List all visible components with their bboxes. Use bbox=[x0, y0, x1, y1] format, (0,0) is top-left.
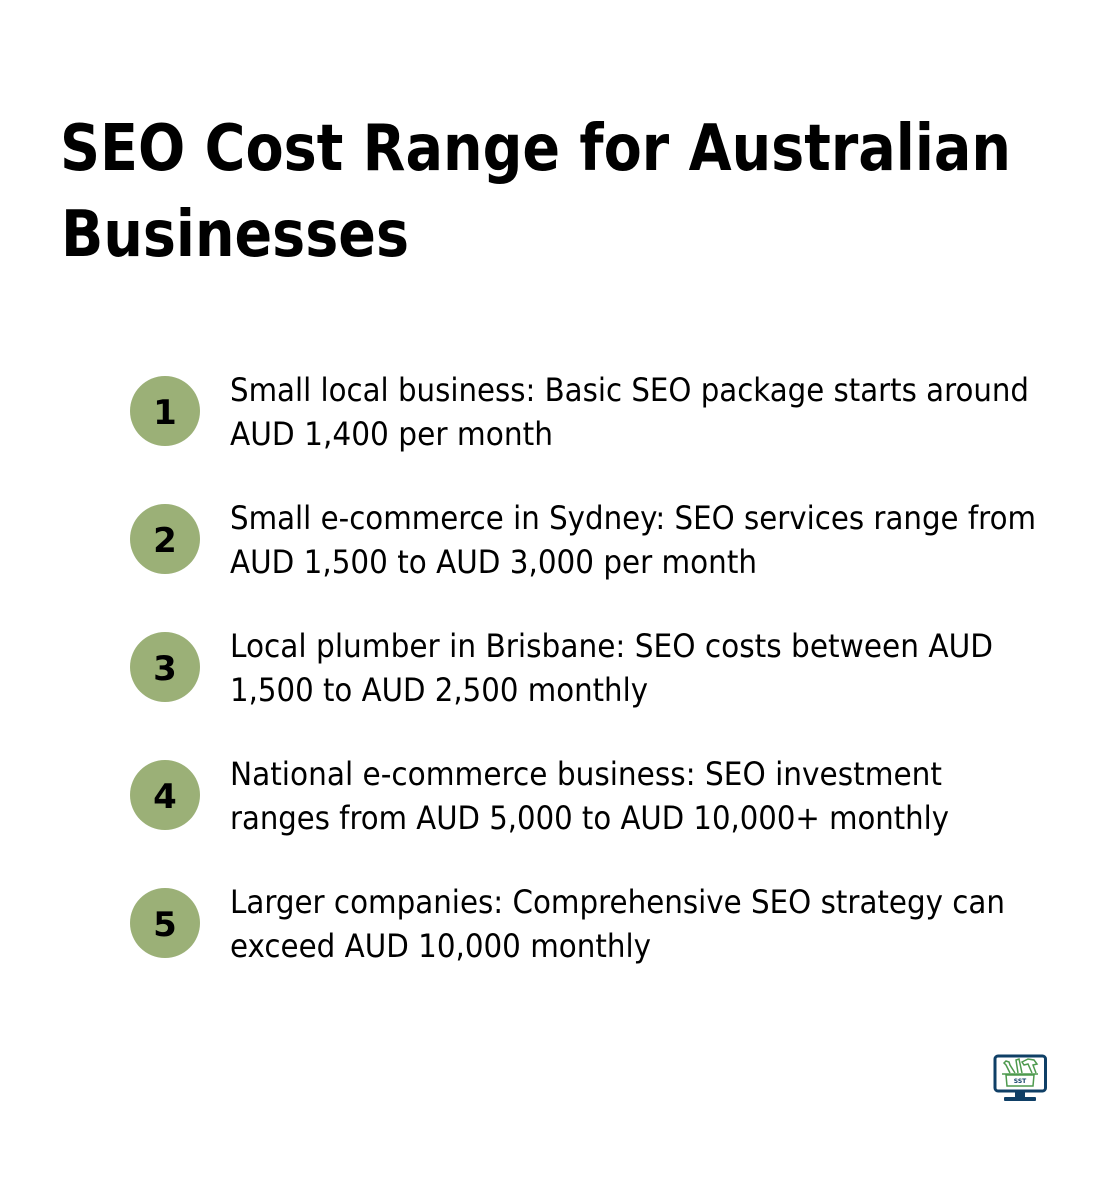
title: Businesses bbox=[61, 198, 409, 272]
text 2 bbox=[230, 499, 1036, 581]
icon: computer monitor with toolbox logo: SST bbox=[1014, 1078, 1027, 1085]
badge 1: 1 bbox=[153, 393, 177, 433]
title bbox=[60, 112, 1011, 272]
badge 5 bbox=[130, 888, 200, 958]
text 5: Larger companies: Comprehensive SEO strategy can bbox=[230, 883, 1005, 921]
item 1 bbox=[130, 371, 1029, 453]
text 4: National e-commerce business: SEO investment bbox=[230, 755, 942, 793]
badge 3: 3 bbox=[153, 649, 177, 689]
text 3: Local plumber in Brisbane: SEO costs between AUD bbox=[230, 627, 993, 665]
text 5 bbox=[230, 883, 1005, 965]
text 3 bbox=[230, 627, 993, 709]
item 5 bbox=[130, 883, 1005, 965]
text 3: 1,500 to AUD 2,500 monthly bbox=[230, 671, 648, 709]
item 2 bbox=[130, 499, 1036, 581]
text 5: exceed AUD 10,000 monthly bbox=[230, 927, 651, 965]
icon: computer monitor with toolbox logo bbox=[995, 1056, 1046, 1101]
text 1: Small local business: Basic SEO package starts around bbox=[230, 371, 1029, 409]
text 1: AUD 1,400 per month bbox=[230, 415, 553, 453]
list of SEO cost ranges bbox=[130, 371, 1036, 965]
badge 5: 5 bbox=[153, 905, 177, 945]
badge 4: 4 bbox=[153, 777, 177, 817]
text 4 bbox=[230, 755, 949, 837]
text 4: ranges from AUD 5,000 to AUD 10,000+ monthly bbox=[230, 799, 949, 837]
badge 2: 2 bbox=[153, 521, 177, 561]
text 1 bbox=[230, 371, 1029, 453]
badge 4 bbox=[130, 760, 200, 830]
badge 3 bbox=[130, 632, 200, 702]
text 2: Small e-commerce in Sydney: SEO services range from bbox=[230, 499, 1036, 537]
badge 2 bbox=[130, 504, 200, 574]
item 4 bbox=[130, 755, 949, 837]
text 2: AUD 1,500 to AUD 3,000 per month bbox=[230, 543, 757, 581]
badge 1 bbox=[130, 376, 200, 446]
item 3 bbox=[130, 627, 993, 709]
